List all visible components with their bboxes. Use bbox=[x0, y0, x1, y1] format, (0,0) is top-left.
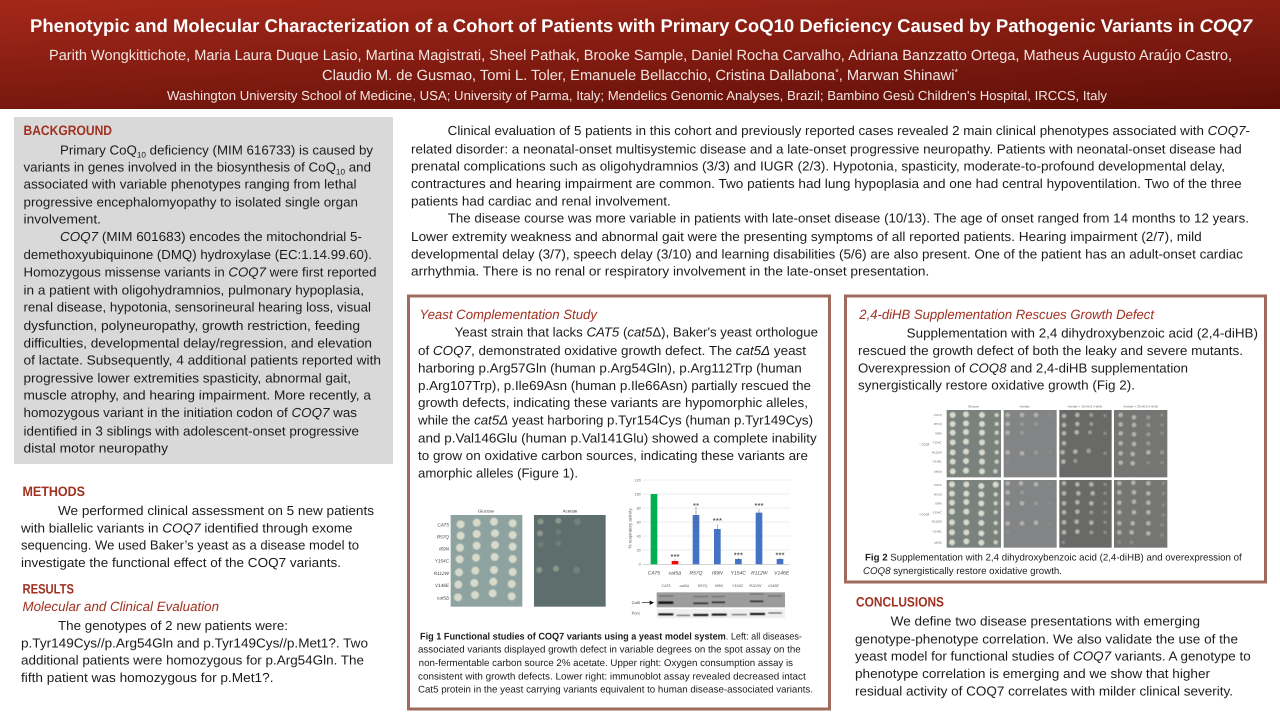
panel: yeast complementation study bbox=[408, 296, 830, 709]
figure 2: spot assay panels: Acetate + 20 nM 2,4-diHB bbox=[1123, 405, 1158, 408]
figure 1: respiratory activity bar chart: R112W bbox=[751, 570, 768, 576]
text: clinical evaluation summary: prenatal complications such as oligohydramnios (3/3) and IUGR (2/3). Hypotonia, spasticity, moderate-to-profound developmental delay, bbox=[411, 159, 1225, 174]
figure 1: respiratory activity bar chart: 80 bbox=[637, 506, 641, 510]
text: clinical evaluation summary: related disorder: a neonatal-onset multisystemic disease and a late-onset progressive neuropathy. Patients with neonatal-onset disease had bbox=[411, 141, 1242, 156]
text: background body: renal disease, hypotonia, sensorineural hearing loss, visual bbox=[24, 300, 371, 315]
figure 1: respiratory activity bar chart: *** bbox=[713, 517, 722, 526]
text: background body: associated with variable phenotypes ranging from lethal bbox=[24, 177, 357, 192]
text: yeast study body: Yeast strain that lacks CAT5 (cat5Δ), Baker's yeast orthologue bbox=[455, 325, 818, 340]
figure 2: spot assay panels: V146E bbox=[933, 530, 942, 533]
figure 2: spot assay panels: Y154C bbox=[932, 441, 942, 444]
text: methods body: sequencing. We used Baker’s yeast as a disease model to bbox=[21, 538, 359, 553]
text: supplementation body: rescued the growth defect of both the leaky and severe mutants. bbox=[858, 343, 1243, 358]
figure 1: respiratory activity bar chart: Y154C bbox=[731, 570, 746, 576]
figure 1: spot assay plates: cat5Δ bbox=[437, 595, 449, 601]
figure 2: spot assay panels: Acetate + 10 nM 2,4-diHB bbox=[1068, 405, 1102, 408]
figure 2: spot assay panels: R57Q bbox=[934, 493, 942, 496]
figure 2: spot assay panels: R112W bbox=[932, 520, 942, 523]
figure 1: respiratory activity bar chart: *** bbox=[754, 501, 764, 510]
caption: figure 2: COQ8 synergistically restore oxidative growth. bbox=[863, 566, 1062, 577]
text: background body: progressive encephalomyopathy to isolated single organ bbox=[24, 194, 358, 209]
text: background body: homozygous variant in the initiation codon of COQ7 was bbox=[24, 405, 358, 420]
heading: results: RESULTS bbox=[22, 581, 74, 596]
figure 2: spot assay panels: -CAT5 bbox=[933, 483, 942, 487]
text: supplementation body: Supplementation with 2,4 dihydroxybenzoic acid (2,4-diHB) bbox=[907, 325, 1258, 340]
arrow: Cat5 band bbox=[642, 601, 653, 604]
authors: * bbox=[954, 67, 958, 77]
figure 1: respiratory activity bar chart: ** bbox=[693, 502, 699, 511]
caption: figure 2: Fig 2 Supplementation with 2,4 dihydroxybenzoic acid (2,4-diHB) and overexpression of bbox=[865, 553, 1242, 564]
text: background body: difficulties, developmental delay/regression, and elevation bbox=[24, 335, 372, 350]
text: methods body: investigate the functional effect of the COQ7 variants. bbox=[21, 555, 341, 570]
subheading: yeast complementation study: Yeast Complementation Study bbox=[420, 307, 598, 322]
text: background body: demethoxyubiquinone (DMQ) hydroxylase (EC:1.14.99.60). bbox=[24, 247, 372, 262]
figure 1: immunoblot: V146E bbox=[768, 584, 779, 588]
text: background body: in a patient with oligohydramnios, pulmonary hypoplasia, bbox=[24, 282, 364, 297]
subheading: molecular and clinical evaluation: Molecular and Clinical Evaluation bbox=[22, 599, 219, 614]
figure 1: immunoblot: cat5Δ bbox=[680, 584, 689, 588]
text: yeast study body: growth defects, indicating these variants are hypomorphic alleles, bbox=[418, 395, 808, 410]
panel: 2,4-diHB supplementation bbox=[846, 296, 1266, 582]
panel: conclusions bbox=[855, 595, 1251, 698]
figure 1: respiratory activity bar chart: 20 bbox=[637, 548, 641, 552]
text: supplementation body: synergistically restore oxidative growth (Fig 2). bbox=[858, 378, 1135, 393]
panel: background bbox=[14, 117, 393, 464]
figure 1: spot assay plates: Y154C bbox=[435, 558, 449, 563]
figure 1: spot assay plates: Glucose bbox=[478, 508, 494, 513]
figure 2: spot assay panels: Y154C bbox=[932, 511, 942, 514]
figure 1: respiratory activity bar chart: I69N bbox=[712, 570, 723, 576]
panel: results molecular and clinical evaluation bbox=[21, 581, 368, 685]
figure 1: respiratory activity bar chart: 120 bbox=[635, 478, 641, 482]
authors: , Marwan Shinawi bbox=[839, 68, 954, 84]
figure 1: spot assay plates: CAT5 bbox=[437, 522, 449, 528]
text: yeast study body: and p.Val146Glu (human p.Val141Glu) showed a complete inability bbox=[418, 431, 817, 446]
figure 1: immunoblot: R57Q bbox=[698, 584, 708, 588]
text: background body: Primary CoQ bbox=[60, 142, 135, 157]
caption: figure 1: associated variants displayed growth defect in variable degrees on the spot assay on the bbox=[418, 645, 801, 656]
text: results body: additional patients were homozygous for p.Arg54Gln. The bbox=[21, 653, 364, 668]
figure 1: spot assay plates: V146E bbox=[435, 583, 449, 588]
figure 1: respiratory activity bar chart: 60 bbox=[637, 520, 641, 524]
text: background body: Homozygous missense variants in COQ7 were first reported bbox=[24, 265, 376, 280]
figure 1: respiratory activity bar chart: % respiratory activity bbox=[628, 508, 633, 548]
figure 1: spot assay plates: I69N bbox=[439, 546, 449, 551]
heading: background: BACKGROUND bbox=[24, 123, 112, 138]
figure 2: spot assay panels: Acetate bbox=[1020, 405, 1030, 408]
figure 1: respiratory activity bar chart: *** bbox=[775, 551, 785, 560]
title: Phenotypic and Molecular Characterization of a Cohort of Patients with Primary CoQ10 Deficiency Caused by Pathogenic Variants in COQ7 bbox=[30, 15, 1253, 36]
figure 1: respiratory activity bar chart: R57Q bbox=[689, 570, 703, 576]
figure 1: spot assay plates bbox=[434, 508, 606, 607]
figure 1: spot assay plates: R57Q bbox=[437, 534, 449, 540]
text: yeast study body: harboring p.Arg57Gln (human p.Arg54Gln), p.Arg112Trp (human bbox=[418, 360, 802, 375]
glucose spots bbox=[952, 414, 997, 543]
text: supplementation body bbox=[858, 325, 1258, 393]
figure 2: spot assay panels: R57Q bbox=[934, 422, 942, 426]
figure 2: spot assay panels: I69N bbox=[935, 502, 942, 505]
figure 1: immunoblot: I69N bbox=[715, 584, 723, 588]
caption: figure 1: non-fermentable carbon source 2% acetate. Upper right: Oxygen consumption assay is bbox=[419, 658, 793, 669]
caption: figure 1 bbox=[418, 631, 813, 695]
figure 1: immunoblot bbox=[632, 584, 785, 618]
figure 1: respiratory activity bar chart: *** bbox=[734, 551, 743, 560]
text: results body: fifth patient was homozygous for p.Met1?. bbox=[21, 670, 274, 685]
authors: * bbox=[835, 67, 839, 77]
text: background body: variants in genes involved in the biosynthesis of CoQ bbox=[24, 160, 328, 175]
subheading: 2,4-diHB supplementation rescues growth defect: 2,4-diHB Supplementation Rescues Growth Defect bbox=[858, 307, 1155, 322]
text: supplementation body: Overexpression of COQ8 and 2,4-diHB supplementation bbox=[858, 360, 1188, 375]
text: background body: of lactate. Subsequently, 4 additional patients reported with bbox=[24, 353, 381, 368]
text: background body: deficiency (MIM 616733) is caused by bbox=[146, 142, 374, 157]
text: clinical evaluation summary: contractures and hearing impairment are common. Two patients had lung hypoplasia and one had central hypoventilation. Two of the three bbox=[411, 176, 1242, 191]
text: background body: 10 bbox=[137, 150, 147, 159]
figure 1 bbox=[434, 478, 790, 618]
text: background body: muscle atrophy, and hearing impairment. More recently, a bbox=[24, 388, 372, 403]
figure 1: spot assay plates: R112W bbox=[434, 571, 450, 576]
text: background body: identified in 3 siblings with adolescent-onset progressive bbox=[24, 423, 359, 438]
text: yeast study body: while the cat5Δ yeast harboring p.Tyr154Cys (human p.Tyr149Cys) bbox=[417, 413, 813, 428]
figure 1: spot assay plates: Acetate bbox=[563, 508, 577, 513]
text: clinical evaluation summary: patients had cardiac and renal involvement. bbox=[411, 193, 671, 208]
text: clinical evaluation summary: The disease course was more variable in patients with late-onset disease (10/13). The age of onset ranged from 14 months to 12 years. bbox=[448, 211, 1249, 226]
figure 1: respiratory activity bar chart: *** bbox=[670, 553, 680, 562]
text: background body: involvement. bbox=[24, 212, 101, 227]
text: yeast study body bbox=[417, 325, 818, 481]
text: background body bbox=[24, 142, 381, 456]
text: conclusions body: genotype-phenotype correlation. We also validate the use of the bbox=[855, 631, 1238, 646]
caption: figure 1: Fig 1 Functional studies of COQ7 variants using a yeast model system. Left: all diseases- bbox=[420, 631, 802, 642]
text: results body bbox=[21, 618, 368, 685]
panel: methods bbox=[20, 484, 375, 570]
figure 1: immunoblot: Por1 bbox=[632, 611, 640, 616]
figure 1: immunoblot: CAT5 bbox=[661, 584, 671, 588]
text: conclusions body: We define two disease presentations with emerging bbox=[891, 614, 1200, 629]
text: results body: The genotypes of 2 new patients were: bbox=[58, 618, 288, 633]
text: conclusions body: yeast model for functional studies of COQ7 variants. A genotype to bbox=[855, 649, 1251, 664]
figure 1: immunoblot: Cat5 bbox=[632, 600, 640, 605]
acetate and supplement spots bbox=[1008, 415, 1163, 542]
figure 1: immunoblot: R112W bbox=[749, 584, 762, 588]
text: conclusions body: phenotype correlation is emerging and we show that higher bbox=[855, 666, 1211, 681]
text: methods body bbox=[20, 503, 375, 570]
text: clinical evaluation summary: arrhythmia. There is no renal or respiratory involvement in the late-onset presentation. bbox=[411, 264, 929, 279]
caption: figure 1: consistent with growth defects. Lower right: immunoblot assay revealed decreased intact bbox=[418, 671, 806, 682]
text: background body: progressive lower extremities spasticity, abnormal gait, bbox=[24, 370, 351, 385]
header banner bbox=[0, 0, 1280, 109]
figure 1: respiratory activity bar chart: 100 bbox=[635, 492, 641, 496]
figure 2: spot assay panels: V146E bbox=[933, 460, 942, 463]
figure 1: immunoblot: Y154C bbox=[732, 584, 743, 588]
text: yeast study body: amorphic alleles (Figure 1). bbox=[418, 466, 578, 481]
text: conclusions body bbox=[855, 614, 1251, 698]
text: conclusions body: residual activity of COQ7 correlates with milder clinical severity. bbox=[855, 683, 1233, 698]
figure 1: respiratory activity bar chart bbox=[628, 478, 790, 576]
figure 2: spot assay panels: -CAT5 bbox=[933, 413, 942, 417]
text: methods body: We performed clinical assessment on 5 new patients bbox=[58, 503, 375, 518]
text: clinical evaluation summary: developmental delay (3/7), speech delay (3/10) and learning disabilities (5/6) are also present. One of the patient has an adult-onset cardiac bbox=[411, 246, 1244, 261]
figure 2: spot assay panels: R112W bbox=[932, 451, 942, 454]
figure 2: spot assay panels bbox=[919, 405, 1167, 548]
text: clinical evaluation summary bbox=[411, 123, 1250, 279]
authors: Claudio M. de Gusmao, Tomi L. Toler, Emanuele Bellacchio, Cristina Dallabona bbox=[322, 68, 836, 84]
figure 1: respiratory activity bar chart: 0 bbox=[639, 563, 641, 567]
figure 2: spot assay panels: Glucose bbox=[968, 405, 979, 408]
text: results body: p.Tyr149Cys//p.Arg54Gln and p.Tyr149Cys//p.Met1?. Two bbox=[21, 635, 368, 650]
figure 1: respiratory activity bar chart: V146E bbox=[774, 570, 789, 576]
figure 1: respiratory activity bar chart: cat5Δ bbox=[669, 570, 681, 576]
caption: figure 2 bbox=[863, 553, 1242, 577]
text: yeast study body: p.Arg107Trp), p.Ile69Asn (human p.Ile66Asn) partially rescued the bbox=[418, 378, 811, 393]
figure 2: spot assay panels: - COQ8 bbox=[919, 443, 929, 446]
figure 2: spot assay panels: +COQ8 bbox=[919, 513, 929, 516]
affiliations: Washington University School of Medicine, USA; University of Parma, Italy; Mendelics Genomic Analyses, Brazil; Bambino Gesù Children's Hospital, IRCCS, Italy bbox=[167, 88, 1108, 103]
text: background body: and bbox=[345, 160, 371, 175]
text: methods body: with biallelic variants in COQ7 identified through exome bbox=[20, 520, 352, 535]
text: yeast study body: to grow on oxidative carbon sources, indicating these variants are bbox=[418, 448, 808, 463]
authors: Parith Wongkittichote, Maria Laura Duque Lasio, Martina Magistrati, Sheel Pathak, Brooke Sample, Daniel Rocha Carvalho, Adriana Banzzatto Ortega, Matheus Augusto Araújo Castro, bbox=[49, 48, 1232, 64]
heading: conclusions: CONCLUSIONS bbox=[856, 595, 944, 610]
figure 1: respiratory activity bar chart: 40 bbox=[637, 534, 641, 538]
heading: methods: METHODS bbox=[22, 484, 85, 499]
figure 2: spot assay panels: cat5Δ bbox=[934, 541, 942, 544]
authors bbox=[49, 48, 1232, 84]
text: yeast study body: of COQ7, demonstrated oxidative growth defect. The cat5Δ yeast bbox=[418, 343, 806, 358]
text: background body: COQ7 (MIM 601683) encodes the mitochondrial 5- bbox=[60, 229, 362, 244]
figure 2: spot assay panels: I69N bbox=[935, 432, 942, 435]
text: clinical evaluation summary: Clinical evaluation of 5 patients in this cohort and previously reported cases revealed 2 main clinical phenotypes associated with COQ7- bbox=[448, 123, 1250, 138]
figure 2: spot assay panels: cat5Δ bbox=[934, 470, 942, 473]
figure 1: respiratory activity bar chart: CAT5 bbox=[648, 570, 660, 576]
caption: figure 1: Cat5 protein in the yeast carrying variants equivalent to human disease-associated variants. bbox=[418, 684, 813, 695]
text: background body: distal motor neuropathy bbox=[24, 441, 169, 456]
text: background body: dysfunction, polyneuropathy, growth restriction, feeding bbox=[24, 318, 360, 333]
text: background body: 10 bbox=[336, 168, 346, 177]
text: clinical evaluation summary: Lower extremity weakness and abnormal gait were the presenting symptoms of all reported patients. Hearing impairment (2/7), mild bbox=[411, 229, 1202, 244]
